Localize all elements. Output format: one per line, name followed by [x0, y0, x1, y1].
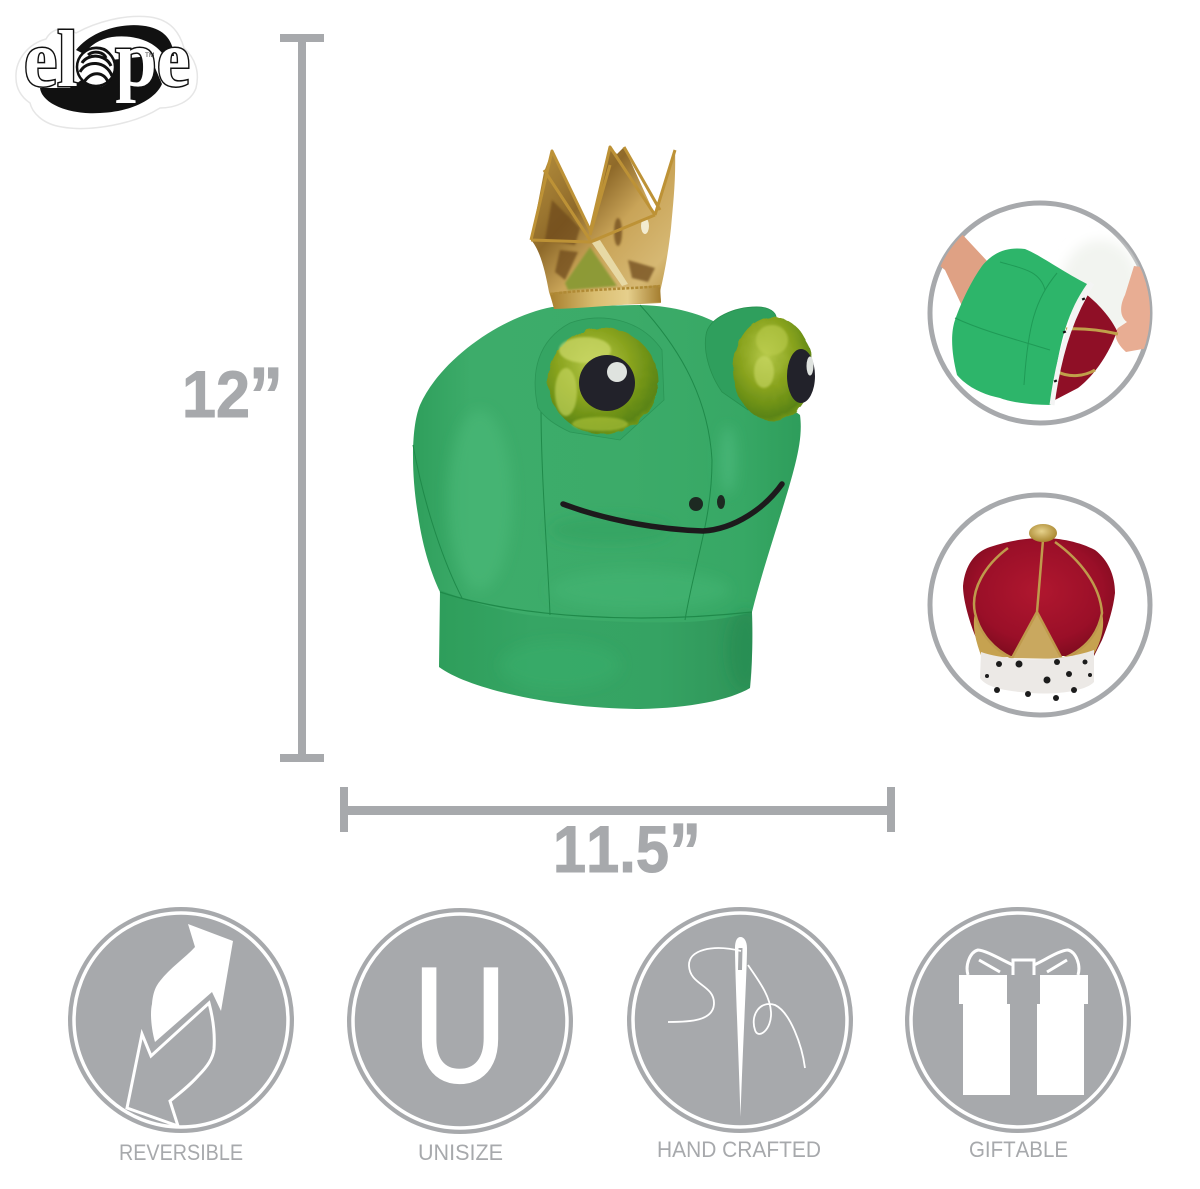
feature: hand crafted	[627, 907, 853, 1162]
hat panel seams	[955, 262, 1057, 385]
left eyeball	[548, 328, 658, 434]
logo swirl ball	[77, 48, 115, 86]
icon: solid arrow	[151, 924, 233, 1042]
right eye stalk	[705, 307, 776, 410]
feature: unisize	[347, 908, 573, 1165]
icon: needle	[735, 937, 747, 1117]
frog mouth	[563, 484, 782, 531]
logo lower blob	[40, 56, 162, 113]
gold braid	[1058, 329, 1118, 376]
inset: royal crown side	[930, 495, 1150, 715]
icon: outline arrow	[127, 1003, 214, 1126]
icon: gift bow	[967, 950, 1079, 975]
red lining	[1053, 295, 1117, 401]
right pupil	[787, 349, 815, 403]
logo halo	[16, 16, 197, 128]
soft body shading	[448, 410, 763, 690]
fur spots	[1055, 298, 1084, 382]
badge	[627, 907, 853, 1133]
right hand	[1116, 266, 1150, 352]
badge	[905, 907, 1131, 1133]
left hand	[940, 235, 987, 304]
label: REVERSIBLE	[119, 1140, 243, 1165]
width dimension line	[340, 787, 895, 832]
label: GIFTABLE	[969, 1137, 1068, 1162]
height dimension line	[280, 34, 324, 762]
badge	[68, 907, 294, 1133]
velvet dome	[963, 538, 1115, 656]
inset: reversible photo	[930, 203, 1165, 423]
elope logo	[16, 16, 197, 128]
gold braid seams	[974, 540, 1102, 659]
hat body	[413, 305, 801, 625]
label: UNISIZE	[418, 1140, 503, 1165]
crown band	[550, 285, 661, 309]
fur trim	[1050, 295, 1088, 405]
crown green reflection	[565, 247, 617, 290]
feature: giftable	[905, 907, 1131, 1162]
logo swoosh	[76, 25, 174, 56]
ermine band	[980, 650, 1094, 694]
width label: ”	[669, 807, 701, 896]
height label: 12	[182, 357, 250, 431]
inset ring	[930, 495, 1150, 715]
left highlight	[607, 362, 627, 382]
crown dark folds	[545, 200, 655, 282]
gold crown	[531, 147, 675, 309]
left eye socket	[535, 318, 664, 440]
badge	[347, 908, 573, 1134]
height label: ”	[249, 351, 283, 440]
label: HAND CRAFTED	[657, 1137, 821, 1162]
width label: 11.5	[553, 812, 669, 886]
green hat	[952, 248, 1087, 405]
icon: gift box	[959, 975, 1088, 1095]
inset ring	[930, 203, 1150, 423]
hat seams	[413, 305, 752, 620]
inset scene	[940, 235, 1150, 405]
crown knob	[1029, 524, 1057, 542]
backdrop shading	[1064, 237, 1140, 330]
right eyeball	[733, 317, 815, 421]
logo wordmark: elope	[24, 16, 190, 104]
crown shine	[641, 218, 649, 234]
height label	[182, 351, 283, 440]
crown highlight fold	[592, 240, 628, 286]
logo swirl	[80, 52, 112, 82]
frog nostrils	[689, 495, 725, 511]
gold panels	[974, 612, 1103, 659]
icon: thread	[668, 948, 805, 1068]
trademark mark: TM	[145, 52, 154, 59]
left pupil	[579, 355, 635, 411]
hat brim	[439, 590, 752, 709]
right highlight	[806, 356, 814, 376]
feature: reversible	[68, 907, 294, 1165]
crown band braid	[550, 286, 660, 294]
icon: letter U: U	[413, 933, 507, 1116]
ermine spots	[985, 659, 1092, 701]
frog prince hat	[413, 147, 815, 709]
crown piping	[531, 147, 675, 242]
